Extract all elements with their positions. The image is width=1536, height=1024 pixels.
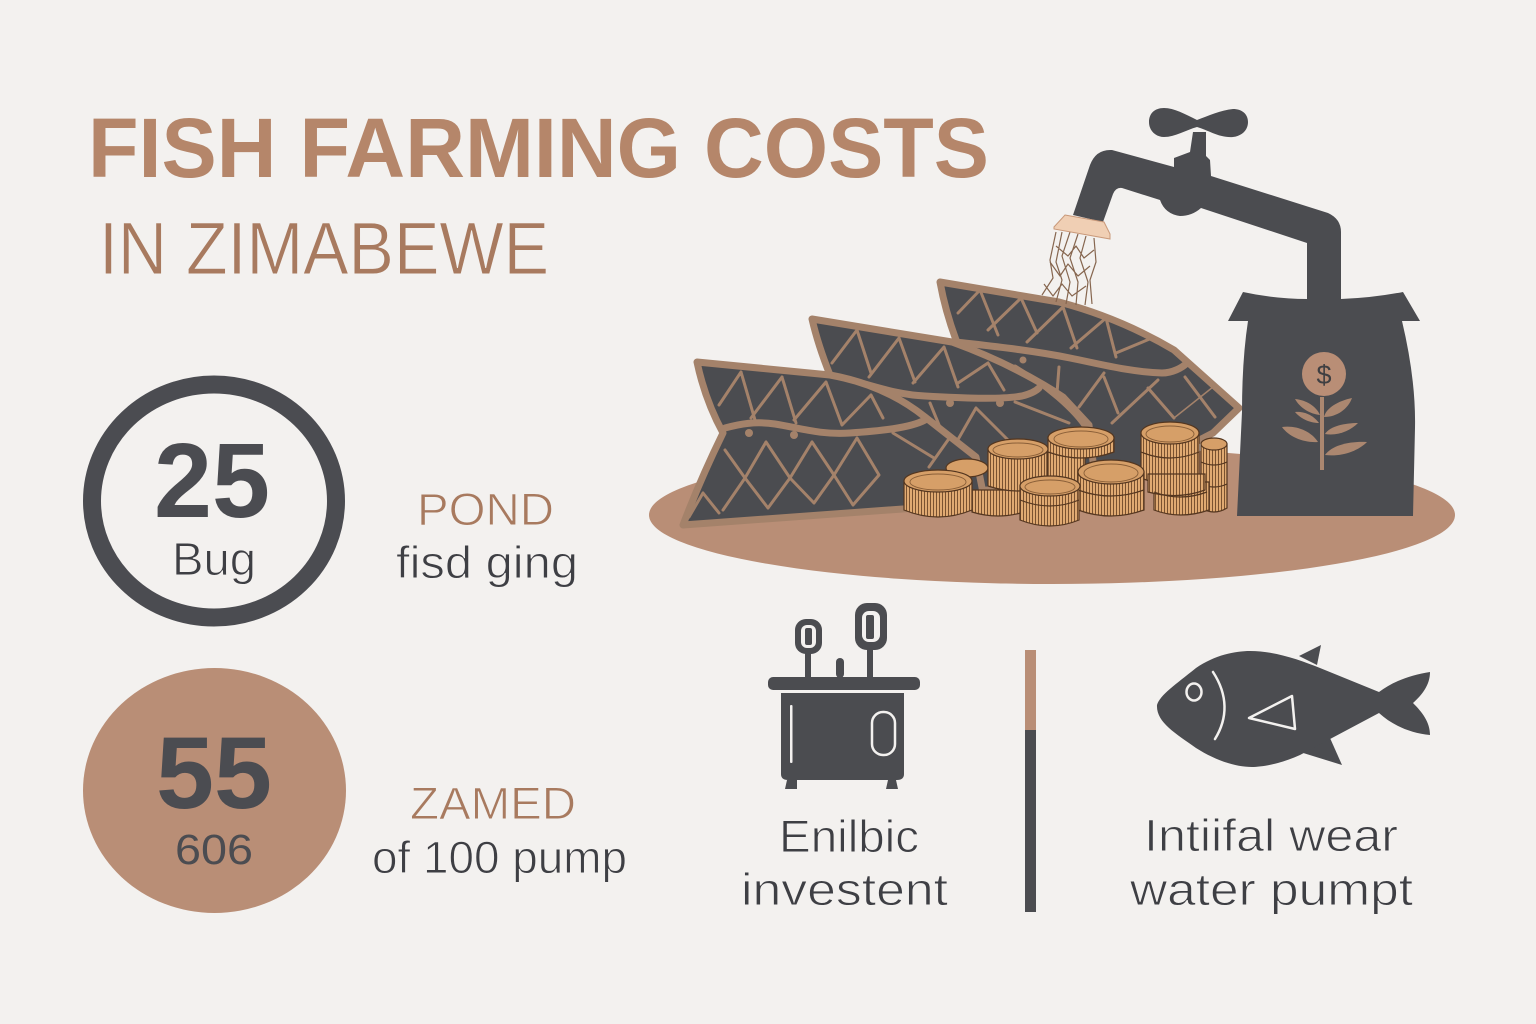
label: zamed: of 100 pump — [372, 832, 627, 883]
plant — [1282, 397, 1367, 470]
faucet handle — [1149, 108, 1248, 137]
divider bar — [1025, 650, 1036, 912]
feed bag: $ — [1316, 360, 1332, 390]
faucet nozzle — [1054, 215, 1110, 239]
subtitle: IN ZIMABEWE — [99, 207, 549, 290]
net: front — [683, 362, 985, 525]
stack tall right — [1141, 422, 1209, 515]
label: zamed: ZAMED — [410, 778, 576, 829]
net: middle — [812, 319, 1095, 500]
icon: fish — [1157, 645, 1430, 767]
infographic canvas — [83, 108, 1455, 914]
stat: outlined circle 25: Bug — [172, 533, 256, 585]
stat: outlined circle 25 — [92, 384, 336, 618]
label: enilbic investent: Enilbic — [779, 811, 919, 862]
stack left behind — [946, 459, 1024, 516]
stack centre right — [1078, 460, 1144, 516]
stat: filled circle 55: 55 — [156, 716, 272, 830]
label: zamed — [372, 778, 627, 883]
label: pond: fisd ging — [396, 537, 578, 588]
stack centre front — [1020, 476, 1080, 526]
icon: equipment box — [768, 603, 920, 789]
label: enilbic investent: investent — [741, 864, 949, 915]
net: back — [940, 282, 1239, 470]
stat: filled circle 55: 606 — [175, 826, 253, 874]
faucet and pipe — [1054, 108, 1341, 302]
water stream net — [1042, 232, 1096, 305]
dollar coin — [1302, 352, 1346, 396]
stat: outlined circle 25: 25 — [154, 422, 270, 540]
label: intiifal wear water pumpt — [1129, 810, 1414, 915]
label: intiifal wear water pumpt: water pumpt — [1129, 864, 1414, 915]
label: intiifal wear water pumpt: Intiifal wear — [1144, 810, 1398, 861]
stack behind centre — [1048, 427, 1114, 485]
stack far right — [1201, 438, 1227, 512]
title: FISH FARMING COSTS — [88, 101, 989, 195]
ground ellipse — [649, 446, 1455, 584]
label: pond — [396, 484, 578, 588]
label: enilbic investent — [741, 811, 949, 915]
coin stacks — [904, 422, 1227, 526]
label: pond: POND — [417, 484, 554, 535]
stat: filled circle 55 — [83, 668, 346, 913]
feed bag — [1228, 292, 1420, 516]
stack tall left — [988, 439, 1048, 491]
stack front left — [904, 470, 972, 517]
